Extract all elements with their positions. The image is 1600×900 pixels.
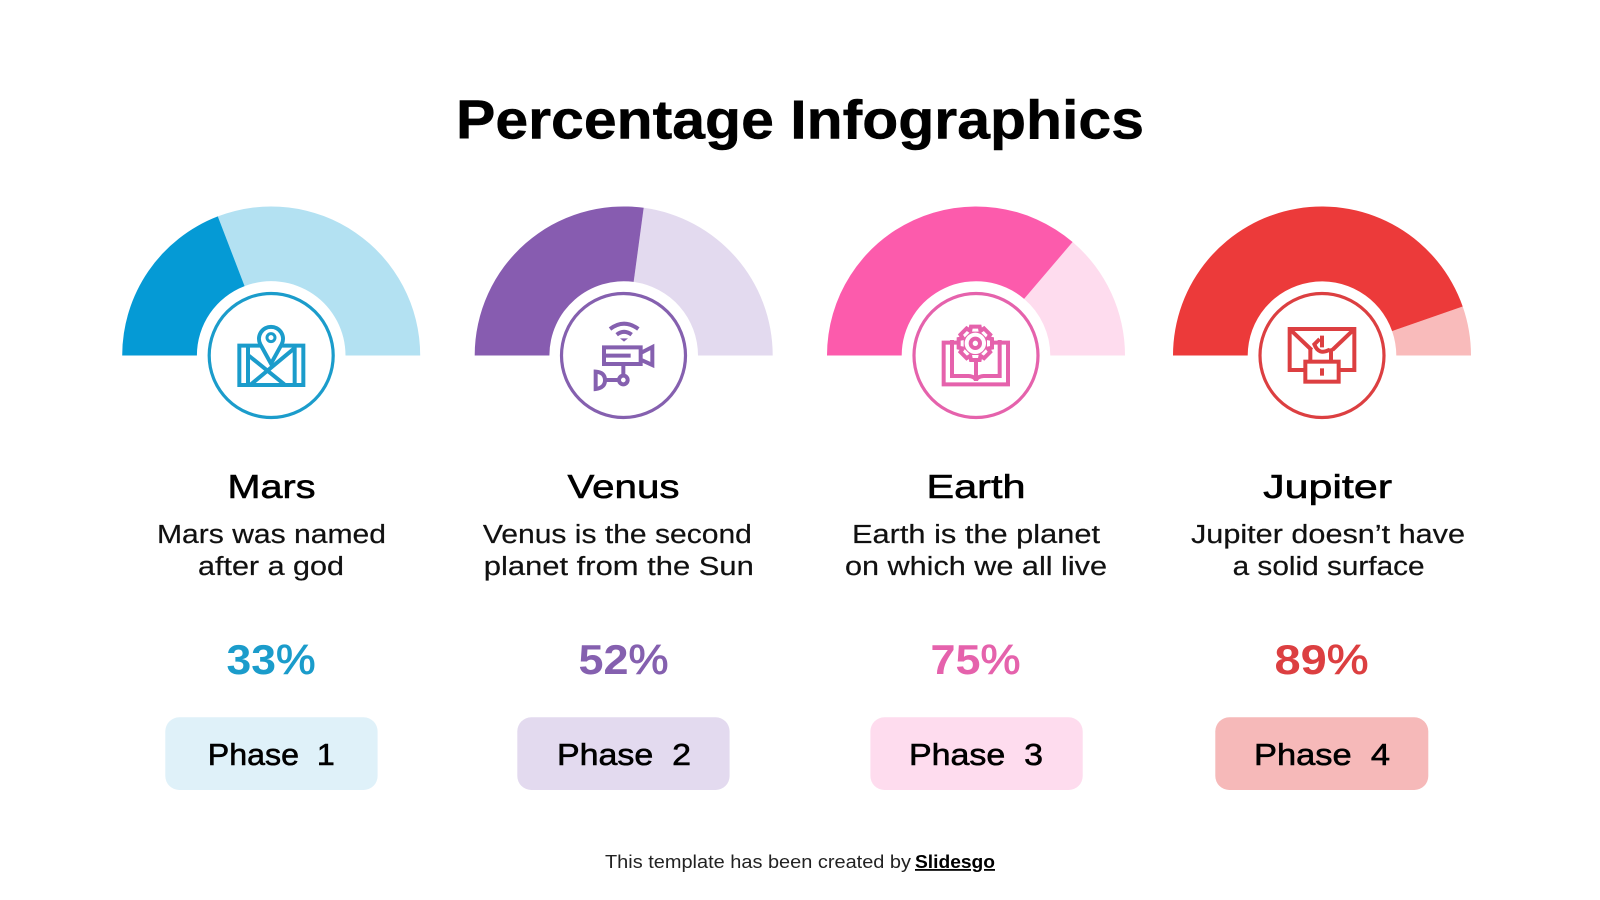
panel: Mars: [122, 207, 420, 790]
description: Mars: after a god: [198, 553, 344, 581]
title: Percentage Infographics: [456, 88, 1144, 150]
description: Jupiter: a solid surface: [1233, 553, 1425, 581]
description: Jupiter: [1191, 521, 1465, 581]
description: Venus: Venus is the second: [483, 521, 752, 549]
phase pill 3: Phase 3: [909, 737, 1043, 772]
gauge: Jupiter 89%: [1173, 207, 1471, 356]
description: Venus: planet from the Sun: [484, 553, 754, 581]
panel: Venus: [475, 206, 773, 790]
gauge: Mars 33%: [122, 207, 420, 356]
phase pill 2: [517, 717, 730, 790]
phase pill 4: Phase 4: [1254, 737, 1390, 772]
icon: envelope with lock: [1290, 329, 1354, 382]
phase pill 1: [165, 717, 378, 790]
phase pill 1: Phase 1: [208, 737, 335, 772]
icon: circle badge: [209, 294, 333, 418]
icon: map with pin: [239, 327, 303, 385]
description: Earth: on which we all live: [845, 553, 1107, 581]
footer credit: This template has been created by: [605, 852, 911, 872]
description: Earth: Earth is the planet: [852, 521, 1100, 549]
percentage: 33%: 33%: [226, 636, 316, 683]
description: Jupiter: Jupiter doesn’t have: [1191, 521, 1465, 549]
label: Mars: Mars: [228, 468, 316, 505]
icon: book with gear: [944, 327, 1008, 384]
percentage: 52%: 52%: [578, 636, 668, 683]
icon: security camera with wifi: [596, 324, 652, 389]
description: Earth: [845, 521, 1107, 581]
description: Mars: Mars was named: [157, 521, 386, 549]
phase pill 2: Phase 2: [557, 737, 691, 772]
label: Venus: Venus: [568, 468, 680, 505]
gauge: Venus 52%: [475, 206, 773, 356]
percentage: 89%: 89%: [1274, 636, 1368, 683]
phase pill 3: [870, 717, 1083, 790]
panel: Jupiter: [1173, 207, 1471, 790]
label: Earth: Earth: [926, 468, 1026, 505]
percentage: 75%: 75%: [930, 636, 1020, 683]
description: Venus: [483, 521, 754, 581]
icon: circle badge: [914, 294, 1038, 418]
description: Mars: [157, 521, 386, 581]
panel: Earth: [827, 206, 1125, 790]
icon: circle badge: [562, 294, 686, 418]
gauge: Earth 75%: [827, 206, 1125, 356]
footer credit: Slidesgo: [915, 852, 995, 872]
phase pill 4: [1215, 717, 1428, 790]
label: Jupiter: Jupiter: [1263, 468, 1392, 505]
icon: circle badge: [1260, 294, 1384, 418]
